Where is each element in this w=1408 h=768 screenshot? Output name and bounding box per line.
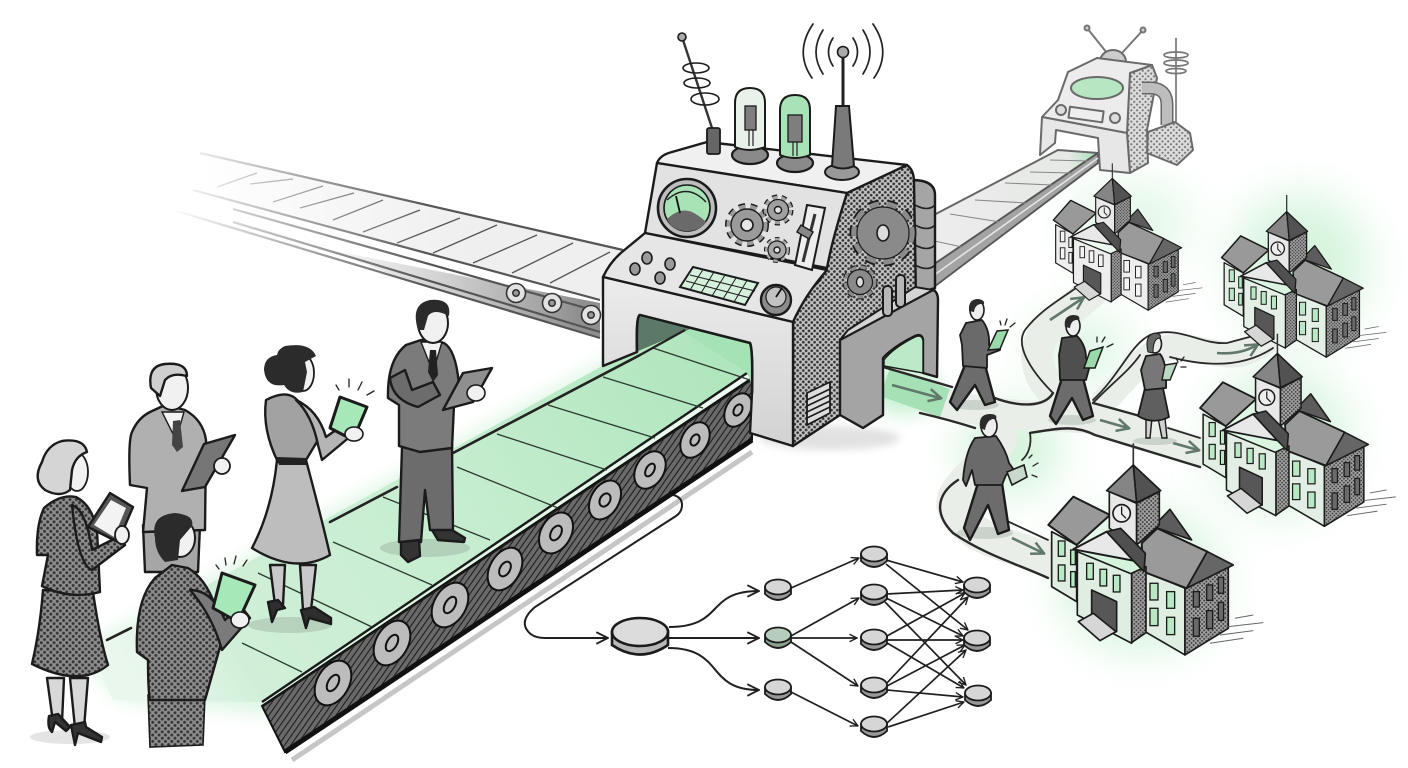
trousers — [399, 445, 453, 542]
arm — [296, 400, 358, 460]
hidden node — [765, 680, 791, 700]
torso — [1141, 354, 1166, 390]
legs — [270, 565, 316, 610]
input loop arrow — [525, 495, 682, 638]
hand — [345, 427, 363, 441]
conveyor rail highlight — [292, 452, 752, 760]
jacket — [129, 405, 206, 532]
large side gear — [855, 205, 911, 261]
rear left conveyor — [173, 153, 623, 338]
side outlet — [840, 290, 938, 428]
vacuum tube right — [777, 95, 813, 172]
keypad — [680, 267, 758, 305]
belt — [277, 457, 307, 465]
large gear — [729, 207, 765, 243]
man from behind with tablet — [137, 513, 255, 747]
side pipes — [883, 275, 905, 316]
belt segment lines — [242, 348, 750, 672]
rear belt outline — [173, 153, 623, 338]
arm — [390, 370, 440, 407]
torso — [960, 320, 1000, 368]
output nodes — [964, 578, 991, 706]
layer three nodes — [861, 546, 887, 737]
rear belt surface — [193, 153, 623, 300]
side wall — [793, 165, 916, 446]
head — [418, 303, 448, 343]
tablet — [443, 368, 492, 410]
distant belt — [930, 150, 1098, 267]
arch shading — [638, 316, 690, 351]
glow rays — [216, 556, 247, 569]
skirt — [32, 590, 108, 676]
hair — [38, 440, 87, 494]
upper gear — [766, 198, 790, 222]
rear belt side wedge — [330, 250, 600, 337]
torso — [1059, 336, 1090, 380]
tie — [428, 350, 438, 382]
rear belt rollers — [506, 284, 600, 324]
tablet — [1007, 465, 1027, 485]
central machine — [603, 24, 938, 450]
coil antenna — [678, 33, 720, 154]
signal antenna — [803, 24, 883, 180]
hand — [115, 526, 129, 544]
delivery paths — [883, 285, 1273, 578]
path edges — [883, 285, 1273, 578]
hand — [467, 385, 485, 401]
connection arrows — [791, 558, 968, 727]
shirt — [421, 342, 442, 372]
legs — [47, 678, 88, 728]
rear belt segments — [217, 173, 610, 283]
rays — [1097, 337, 1113, 347]
front body — [603, 277, 793, 446]
clipboard — [182, 435, 235, 491]
conveyor side frame — [262, 378, 752, 752]
arm — [190, 590, 250, 650]
torso — [963, 436, 1014, 486]
lower gear — [767, 240, 787, 260]
hair — [1065, 315, 1079, 328]
front upper panel — [645, 163, 847, 268]
box — [1147, 122, 1193, 165]
head — [981, 415, 997, 437]
head — [1066, 316, 1080, 336]
belt edge in arch — [640, 330, 685, 355]
walker four — [957, 414, 1038, 540]
belt edge — [262, 373, 747, 702]
jacket — [37, 496, 100, 595]
gauge — [658, 179, 716, 237]
belt lip — [262, 381, 750, 707]
tower — [1164, 38, 1188, 123]
belt surface — [90, 332, 747, 702]
toggles — [630, 252, 675, 284]
pipe inner — [1142, 88, 1167, 125]
front upper — [1042, 58, 1152, 133]
rear right conveyor and distant machine — [930, 26, 1193, 290]
walker three — [1133, 333, 1186, 445]
vent — [807, 382, 830, 425]
skirt — [1138, 388, 1169, 421]
clipboard — [88, 493, 133, 542]
legs — [950, 365, 995, 410]
school upper right — [1222, 195, 1386, 357]
outlet top — [840, 287, 933, 340]
hidden node — [765, 580, 791, 600]
path fills — [930, 292, 1265, 560]
path arrows — [892, 298, 1257, 553]
distant belt segments — [930, 160, 1088, 247]
hair — [416, 300, 449, 330]
man with tablet on belt — [380, 300, 492, 562]
shadow — [248, 617, 332, 633]
legs — [1050, 378, 1093, 424]
hair — [980, 414, 996, 430]
head — [1148, 335, 1162, 353]
top surface — [657, 142, 907, 193]
shadow — [380, 539, 470, 557]
hair — [1147, 333, 1160, 353]
walker one — [950, 299, 1015, 410]
small side gear — [846, 268, 874, 296]
school top — [1053, 163, 1203, 310]
arch interior — [637, 315, 753, 385]
vacuum tube left — [732, 88, 768, 164]
heels — [268, 600, 331, 628]
cylinder ridges — [915, 205, 935, 268]
antennas — [1084, 26, 1146, 53]
input node — [612, 618, 668, 654]
face — [66, 453, 88, 491]
skirt — [252, 460, 330, 564]
belt left edge strokes — [107, 355, 640, 640]
green glows — [80, 180, 1368, 715]
woman with tablet — [248, 345, 374, 633]
distant belt rail highlight — [930, 158, 1098, 278]
heels — [48, 714, 102, 745]
legs — [964, 483, 1009, 540]
shirt — [162, 412, 184, 440]
screen — [1071, 77, 1123, 99]
distant belt truss — [930, 153, 1098, 290]
glow rays — [336, 379, 374, 395]
rollers — [307, 388, 757, 712]
gears front — [729, 198, 790, 260]
rays — [1176, 357, 1186, 367]
ground shadow — [760, 426, 900, 450]
head — [156, 366, 188, 410]
knob — [761, 285, 791, 315]
hidden node highlighted — [765, 628, 791, 648]
path green start — [885, 382, 945, 403]
distant machine — [1040, 26, 1193, 173]
keypad — [1068, 107, 1104, 122]
side gears — [846, 205, 911, 296]
dials — [1056, 105, 1120, 123]
bodice — [265, 394, 318, 462]
hand — [214, 458, 230, 474]
jacket — [137, 565, 222, 700]
tablet — [1162, 363, 1177, 380]
face — [292, 355, 314, 391]
arch top edge — [637, 315, 752, 393]
woman with clipboard — [30, 440, 133, 745]
school middle right — [1200, 334, 1396, 526]
tablet — [330, 397, 367, 440]
tablet — [1084, 347, 1103, 368]
rear cylinder — [912, 180, 935, 295]
trousers — [148, 695, 205, 747]
main conveyor — [90, 332, 757, 760]
legs — [143, 525, 200, 572]
front lower — [1040, 117, 1130, 173]
legs — [1146, 418, 1167, 438]
hair — [264, 345, 316, 393]
rays — [1029, 455, 1038, 477]
shoes — [401, 530, 465, 562]
conveyor lower rail — [285, 440, 752, 752]
neural network — [525, 495, 991, 737]
hand — [231, 612, 249, 628]
slider — [795, 205, 825, 270]
head — [970, 300, 984, 320]
outlet opening — [884, 336, 923, 373]
branch arrows — [668, 591, 759, 690]
side wall — [1127, 65, 1157, 173]
head — [165, 519, 195, 557]
paper — [94, 500, 126, 537]
front lower panel — [603, 233, 827, 322]
rays — [1000, 319, 1015, 327]
hair — [150, 364, 187, 396]
dome — [1100, 50, 1126, 74]
school bottom — [1048, 443, 1263, 655]
hair — [969, 299, 984, 312]
man with clipboard — [129, 364, 235, 572]
hair — [154, 513, 192, 562]
jacket — [388, 340, 459, 452]
tablet — [988, 330, 1008, 350]
arm — [72, 505, 125, 570]
pipe — [1142, 88, 1167, 125]
shadow — [30, 730, 110, 744]
tie — [172, 420, 183, 452]
tablet — [213, 573, 255, 622]
walker two — [1048, 315, 1113, 425]
